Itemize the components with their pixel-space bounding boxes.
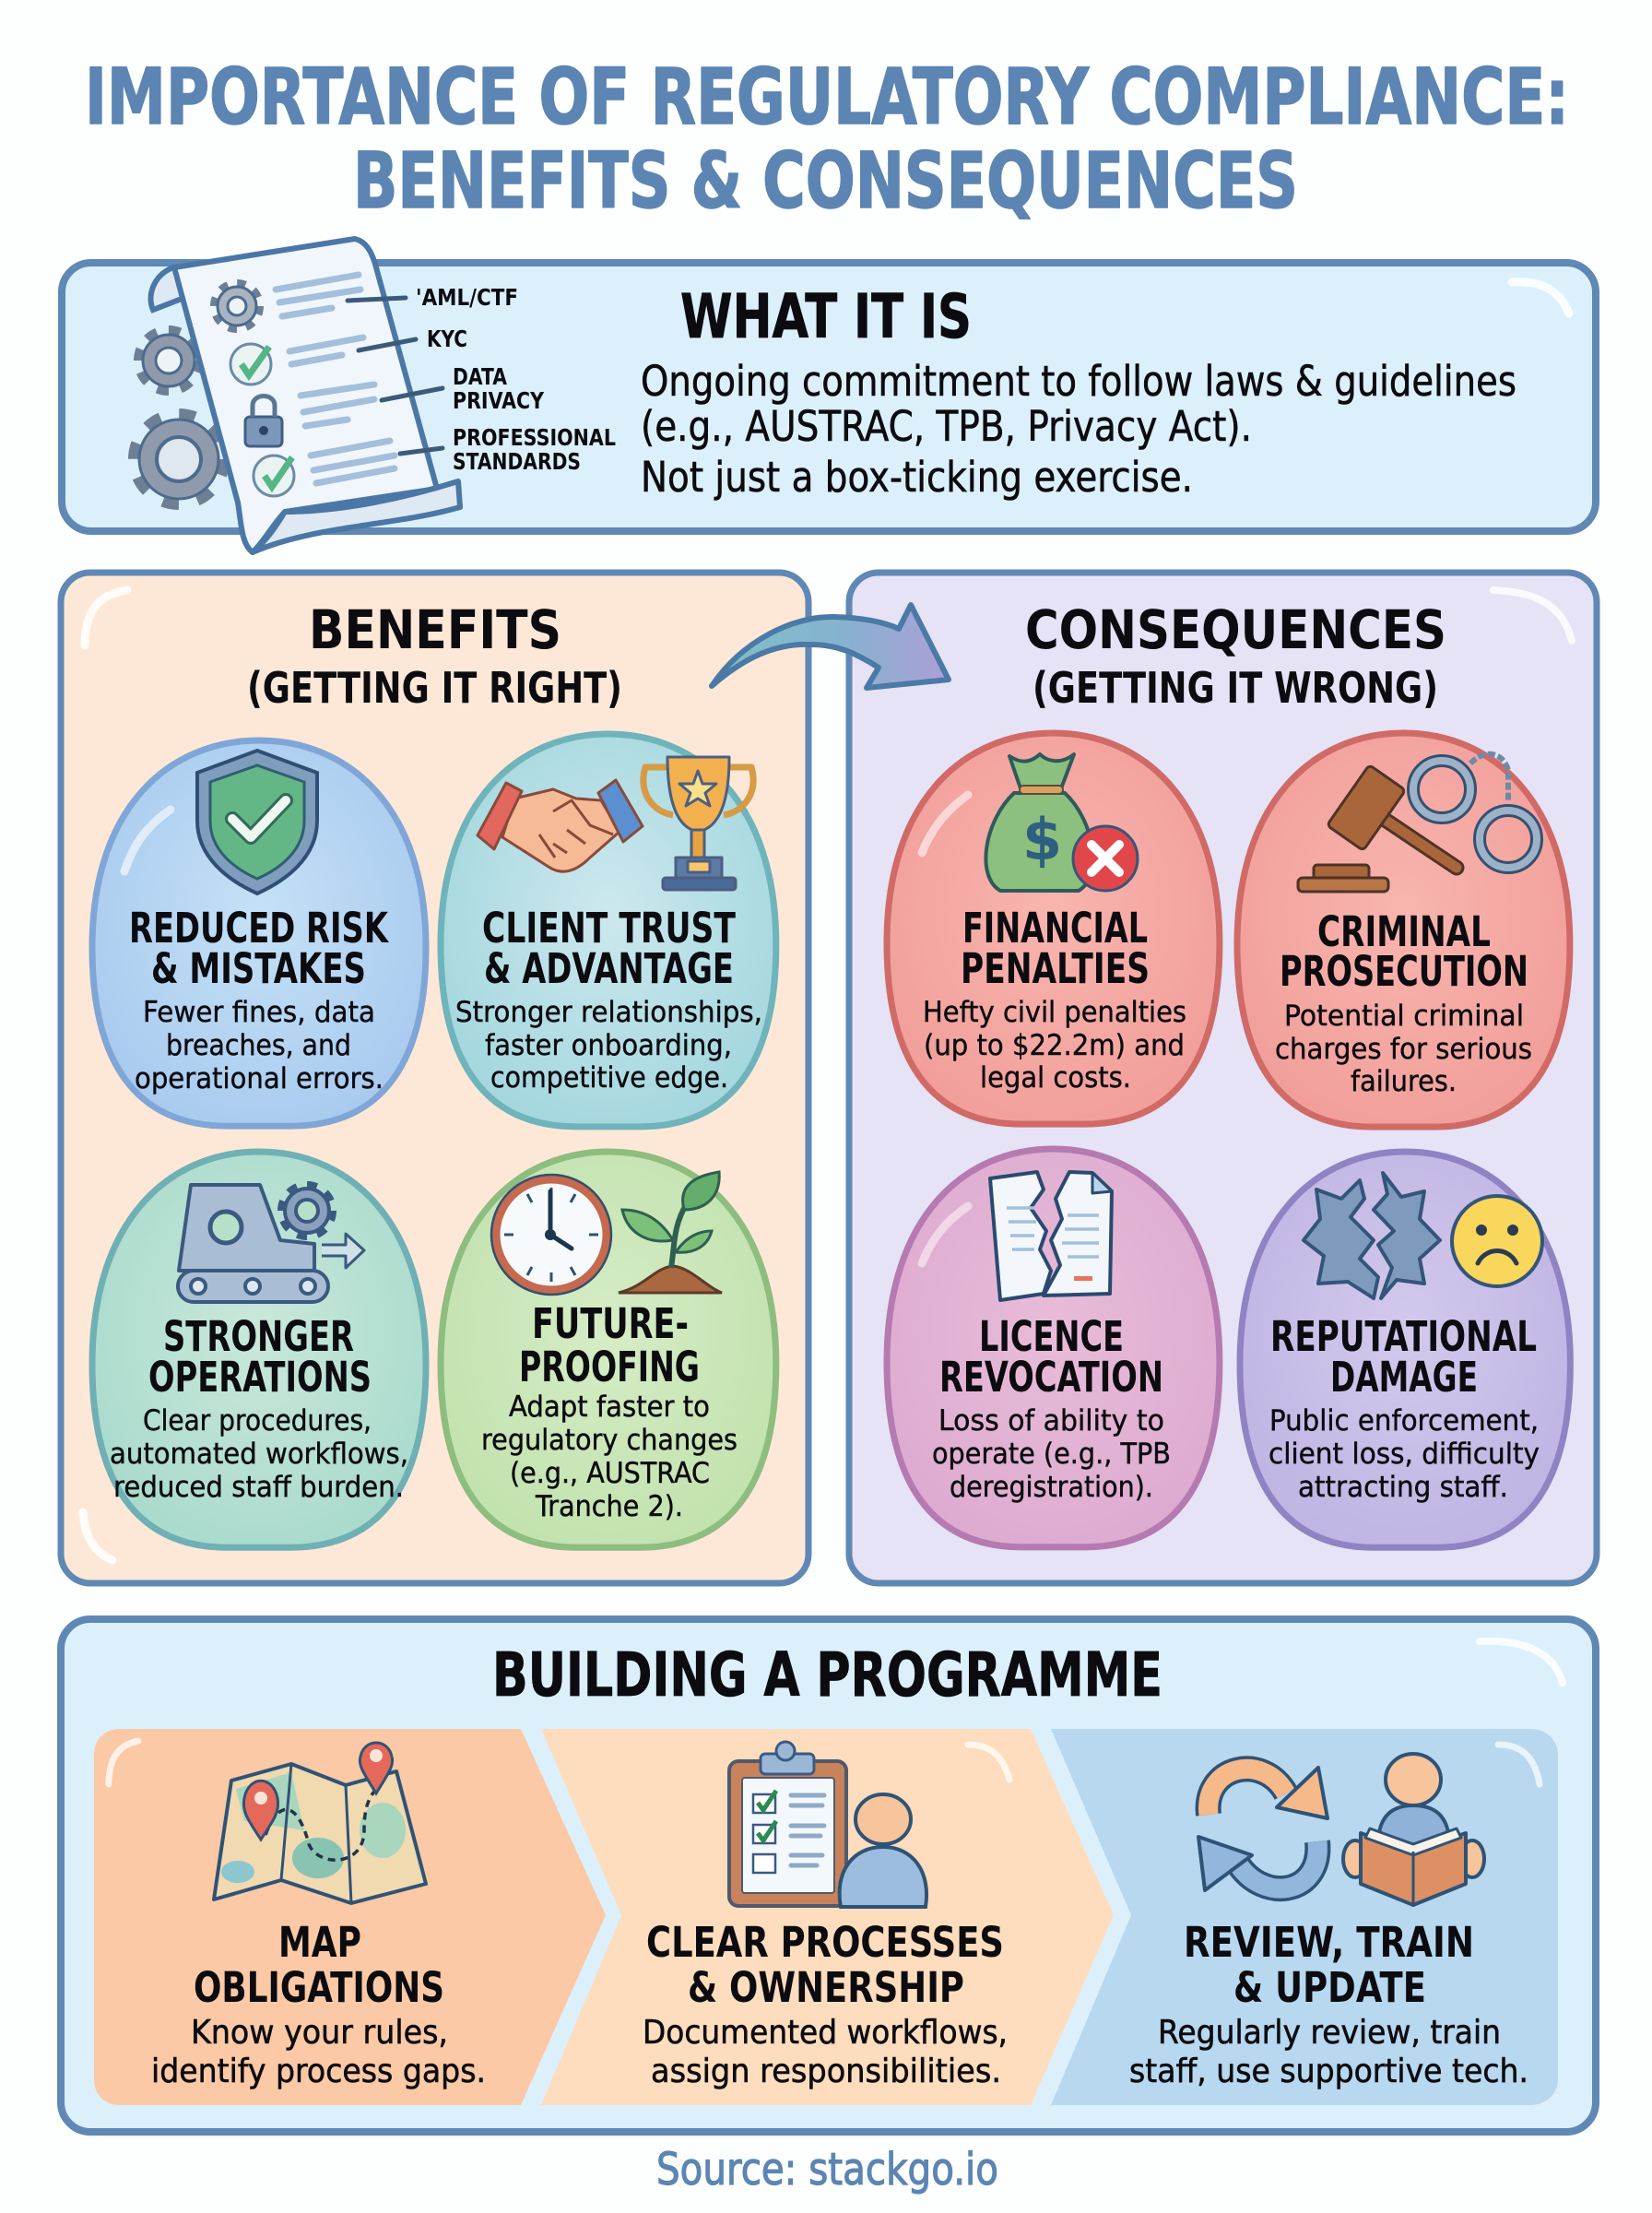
icon: sync arrows	[1198, 1768, 1328, 1890]
step: map obligations: MAP	[278, 1918, 361, 1967]
card: stronger operations: STRONGER	[163, 1312, 354, 1361]
icon: machine with gear	[178, 1185, 364, 1302]
icon: gears	[136, 332, 222, 503]
icon: compliance scroll with gears	[136, 239, 460, 552]
source: Source: stackgo.io	[656, 2144, 998, 2195]
step: map obligations: Know your rules,	[191, 2014, 448, 2052]
icon: money bag: $	[1022, 806, 1062, 873]
icon: torn document	[990, 1172, 1112, 1300]
card: reputational damage: Public enforcement,	[1269, 1404, 1539, 1438]
card: licence revocation: REVOCATION	[939, 1353, 1163, 1402]
card: future-proofing: (e.g., AUSTRAC	[510, 1457, 710, 1490]
card: financial penalties: PENALTIES	[961, 944, 1150, 993]
icon: clock	[491, 1175, 611, 1295]
step: clear processes	[541, 1729, 1114, 2105]
card: stronger operations: automated workflows,	[110, 1438, 408, 1471]
card: stronger operations: OPERATIONS	[148, 1353, 372, 1402]
step: map obligations	[94, 1729, 606, 2105]
step: clear processes: & OWNERSHIP	[688, 1963, 964, 2012]
title: BENEFITS & CONSEQUENCES	[353, 136, 1298, 226]
heading: building a programme: BUILDING A PROGRAMME	[492, 1639, 1162, 1710]
step: review and train: REVIEW, TRAIN	[1184, 1918, 1474, 1967]
card: criminal prosecution: Potential criminal	[1284, 1000, 1524, 1033]
icon: money bag	[985, 754, 1138, 891]
step: clear processes: CLEAR PROCESSES	[646, 1918, 1004, 1967]
step: review and train: Regularly review, train	[1158, 2014, 1501, 2052]
heading: consequences	[1025, 598, 1446, 713]
card: stronger operations: Clear procedures,	[143, 1404, 372, 1438]
card: financial penalties	[887, 733, 1220, 1124]
card: client trust: CLIENT TRUST	[482, 904, 736, 953]
step: review and train: staff, use supportive tech.	[1129, 2053, 1528, 2090]
card: reputational damage: DAMAGE	[1330, 1353, 1478, 1402]
card: financial penalties: FINANCIAL	[962, 904, 1148, 953]
card: client trust: Stronger relationships,	[455, 996, 762, 1029]
card: client trust: & ADVANTAGE	[484, 944, 734, 993]
title	[85, 52, 1569, 226]
icon: sprout	[619, 1172, 722, 1293]
scroll labels	[416, 284, 616, 475]
card: client trust	[441, 734, 776, 1127]
scroll labels: STANDARDS	[453, 448, 581, 475]
scroll labels: PROFESSIONAL	[453, 424, 616, 451]
card: reduced risk: & MISTAKES	[151, 944, 366, 993]
definition text	[641, 357, 1516, 502]
heading: consequences: CONSEQUENCES	[1025, 598, 1446, 661]
scroll labels: DATA	[453, 363, 508, 390]
card: licence revocation: operate (e.g., TPB	[932, 1438, 1171, 1471]
icon: broken star	[1304, 1173, 1440, 1298]
card: criminal prosecution: CRIMINAL	[1317, 907, 1491, 956]
icon: shield	[197, 751, 317, 893]
scroll labels: 'AML/CTF	[416, 284, 518, 311]
card: future-proofing	[441, 1152, 776, 1547]
card: reduced risk: breaches, and	[166, 1029, 351, 1062]
panel: what it is	[62, 239, 1596, 552]
card: reputational damage: attracting staff.	[1298, 1471, 1508, 1504]
card: financial penalties: Hefty civil penalties	[923, 996, 1186, 1029]
panel: building a programme	[61, 1619, 1596, 2132]
card: reduced risk	[92, 740, 426, 1126]
step: map obligations: identify process gaps.	[151, 2053, 486, 2090]
card: reduced risk: operational errors.	[135, 1062, 384, 1095]
step: clear processes: assign responsibilities.	[651, 2053, 1001, 2090]
icon: trophy	[643, 757, 753, 890]
icon: map with pins	[214, 1743, 426, 1903]
icon: handcuffs	[1413, 754, 1537, 868]
card: financial penalties: (up to $22.2m) and	[924, 1029, 1185, 1062]
step: review and train: & UPDATE	[1233, 1963, 1426, 2012]
card: future-proofing: Adapt faster to	[509, 1391, 710, 1424]
card: criminal prosecution	[1237, 733, 1570, 1127]
icon: handshake	[478, 780, 643, 871]
card: future-proofing: Tranche 2).	[535, 1490, 683, 1523]
card: future-proofing: PROOFING	[519, 1343, 700, 1391]
icon: gavel	[1298, 764, 1457, 892]
heading: benefits	[247, 598, 622, 713]
panel: benefits	[61, 573, 808, 1583]
card: criminal prosecution: PROSECUTION	[1280, 947, 1528, 996]
definition text: Not just a box-ticking exercise.	[641, 453, 1193, 502]
panel: consequences	[849, 573, 1597, 1583]
card: reduced risk: REDUCED RISK	[129, 904, 390, 953]
card: criminal prosecution: failures.	[1351, 1065, 1457, 1098]
card: future-proofing: FUTURE-	[532, 1299, 689, 1348]
definition text: Ongoing commitment to follow laws & guidelines	[641, 357, 1516, 406]
step: review and train	[1051, 1729, 1558, 2105]
arrow: benefits to consequences	[712, 605, 949, 688]
card: financial penalties: legal costs.	[980, 1061, 1131, 1095]
card: reputational damage: REPUTATIONAL	[1270, 1312, 1537, 1361]
step: clear processes: Documented workflows,	[643, 2014, 1008, 2052]
card: licence revocation: Loss of ability to	[938, 1404, 1164, 1438]
scroll labels: KYC	[427, 325, 467, 352]
card: licence revocation: deregistration).	[950, 1471, 1153, 1504]
card: future-proofing: regulatory changes	[481, 1424, 738, 1457]
heading: what it is: WHAT IT IS	[680, 281, 972, 352]
card: stronger operations	[92, 1152, 426, 1547]
heading: benefits: BENEFITS	[309, 598, 561, 661]
card: licence revocation: LICENCE	[979, 1312, 1124, 1361]
card: client trust: competitive edge.	[490, 1061, 728, 1095]
definition text: (e.g., AUSTRAC, TPB, Privacy Act).	[641, 402, 1252, 451]
heading: benefits: (GETTING IT RIGHT)	[247, 663, 622, 713]
card: licence revocation	[887, 1149, 1220, 1547]
heading: consequences: (GETTING IT WRONG)	[1032, 663, 1438, 713]
icon: clipboard with person	[729, 1742, 926, 1907]
step: map obligations: OBLIGATIONS	[194, 1963, 444, 2012]
card: criminal prosecution: charges for serious	[1275, 1033, 1532, 1066]
card: reputational damage: client loss, difficulty	[1268, 1438, 1540, 1471]
icon: sad face	[1452, 1196, 1542, 1286]
icon: person reading	[1343, 1754, 1484, 1905]
card: reputational damage	[1240, 1152, 1570, 1547]
card: client trust: faster onboarding,	[485, 1029, 732, 1062]
scroll labels: PRIVACY	[453, 387, 545, 414]
card: reduced risk: Fewer fines, data	[143, 996, 375, 1029]
card: stronger operations: reduced staff burden.	[113, 1471, 404, 1504]
